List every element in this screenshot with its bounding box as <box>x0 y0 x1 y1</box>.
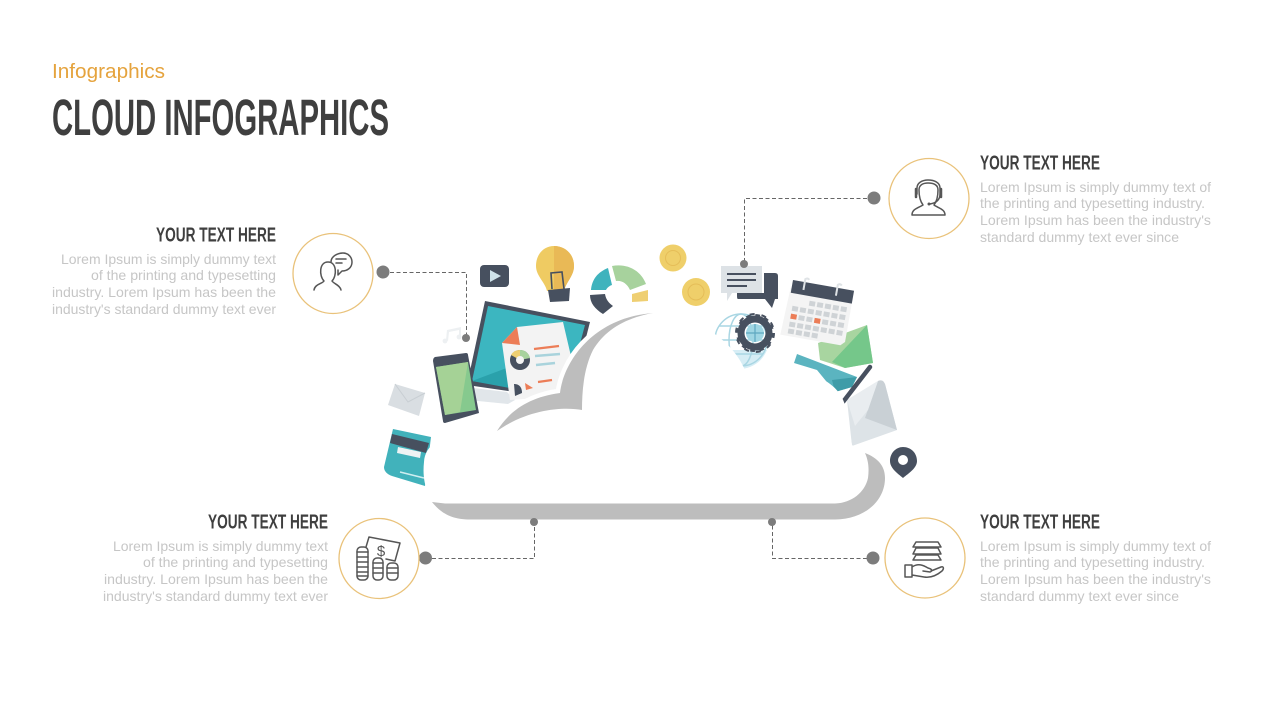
icon: gear <box>736 314 774 352</box>
icon: laptop <box>465 301 590 404</box>
heading: YOUR TEXT HERE <box>980 512 1100 534</box>
body text: Lorem Ipsum is simply dummy text <box>61 251 276 267</box>
icon: pen <box>843 367 870 402</box>
body text <box>980 179 1211 245</box>
body text: industry's standard dummy text ever <box>103 588 328 604</box>
icon: green envelope <box>818 325 873 368</box>
body text: Lorem Ipsum has been the industry's <box>980 212 1211 228</box>
title: CLOUD INFOGRAPHICS <box>52 89 389 146</box>
panel: bottom right callout <box>885 512 1211 604</box>
icon: small envelope <box>388 384 425 416</box>
cloud <box>424 313 885 520</box>
icon: large envelope <box>847 380 897 446</box>
body text: standard dummy text ever since <box>980 229 1179 245</box>
body text: of the printing and typesetting <box>143 554 328 570</box>
body text: of the printing and typesetting <box>91 267 276 283</box>
body text: Lorem Ipsum is simply dummy text <box>113 538 328 554</box>
icon: headset agent <box>889 158 969 238</box>
icon: donut chart <box>590 265 648 314</box>
icon: report document <box>502 322 580 400</box>
icon: hand holding stack <box>885 518 965 598</box>
icon: music notes <box>443 327 461 343</box>
connector: bottom right <box>768 518 880 564</box>
icon: money and coins <box>339 518 419 598</box>
panel: top left callout <box>52 224 373 317</box>
connector: bottom left <box>419 518 538 564</box>
body text: Lorem Ipsum has been the industry's <box>980 571 1211 587</box>
icon: smartphone <box>433 353 479 423</box>
body text: Lorem Ipsum is simply dummy text of <box>980 179 1211 195</box>
icon: money and coins: $ <box>377 543 386 560</box>
panel: top right callout <box>889 152 1211 245</box>
icon: teal folder <box>794 354 857 392</box>
icon: location pin <box>890 447 917 478</box>
icon: play button <box>480 265 509 287</box>
icon cluster: flat icons behind cloud <box>384 244 897 486</box>
icon: coin bottom <box>682 278 710 306</box>
icon: credit card <box>384 429 431 486</box>
heading: YOUR TEXT HERE <box>208 512 328 534</box>
cloud shadow bottom <box>432 453 885 520</box>
icon: speech bubbles <box>721 266 778 308</box>
icon: coin top <box>660 244 686 272</box>
icon: people talking <box>293 234 373 314</box>
body text <box>52 251 276 317</box>
body text: the printing and typesetting industry. <box>980 554 1205 570</box>
body text <box>980 538 1211 604</box>
heading: YOUR TEXT HERE <box>156 224 276 246</box>
body text: standard dummy text ever since <box>980 588 1179 604</box>
icon: light bulb <box>536 246 574 302</box>
cloud shadow top <box>497 313 653 431</box>
body text: the printing and typesetting industry. <box>980 195 1205 211</box>
body text: industry. Lorem Ipsum has been the <box>104 571 328 587</box>
icon: calendar <box>780 276 855 346</box>
cloud white body <box>424 313 870 504</box>
connector: top right <box>740 192 880 268</box>
icon: globe <box>715 314 767 369</box>
panel: bottom left callout <box>103 512 419 604</box>
body text: Lorem Ipsum is simply dummy text of <box>980 538 1211 554</box>
heading: YOUR TEXT HERE <box>980 152 1100 174</box>
subtitle: Infographics <box>52 61 165 83</box>
body text <box>103 538 328 604</box>
body text: industry's standard dummy text ever <box>52 301 276 317</box>
connector: top left <box>376 266 470 342</box>
body text: industry. Lorem Ipsum has been the <box>52 284 276 300</box>
